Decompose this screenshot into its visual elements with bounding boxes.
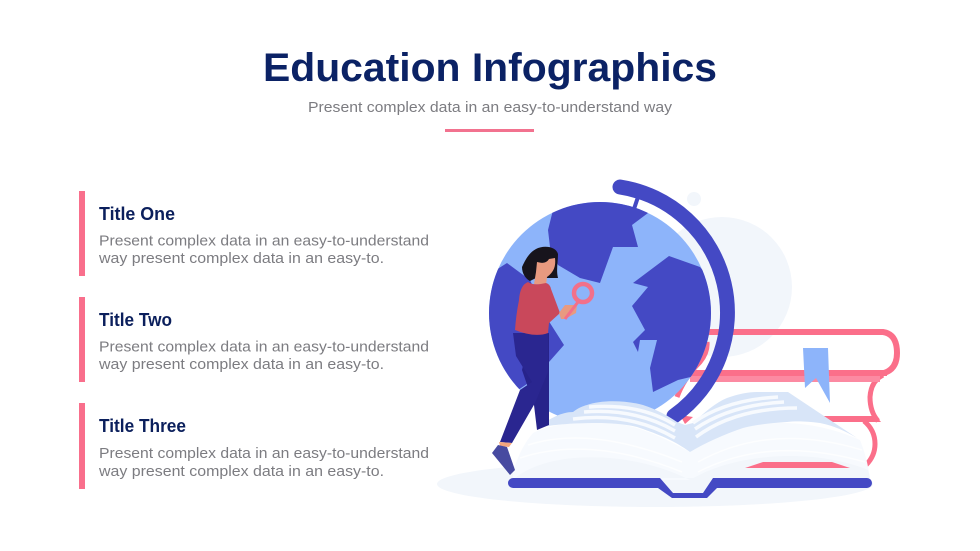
pink book edge <box>745 462 850 468</box>
background circles <box>652 192 792 357</box>
heading one: Title One <box>99 203 175 224</box>
body text two: Present complex data in an easy-to-understand <box>99 338 429 356</box>
hand <box>559 305 577 319</box>
accent bar one <box>79 191 85 276</box>
neck and face <box>534 258 555 285</box>
infographic canvas <box>79 52 900 507</box>
accent bar three <box>79 403 85 489</box>
heading two: Title Two <box>99 309 172 330</box>
body text three: Present complex data in an easy-to-understand <box>99 445 429 462</box>
icon: open book <box>508 392 872 498</box>
heading three: Title Three <box>99 415 186 436</box>
body text one: Present complex data in an easy-to-understand <box>99 232 429 250</box>
magnifier <box>565 284 592 319</box>
globe stand pin <box>634 197 638 209</box>
icon: woman with magnifier <box>492 247 592 475</box>
ankle <box>499 442 512 447</box>
icon: globe <box>480 187 727 424</box>
left page stack <box>513 422 690 480</box>
ground shadow <box>437 461 873 507</box>
front leg <box>500 333 548 443</box>
globe stand arc <box>620 187 727 416</box>
shoe <box>492 445 515 475</box>
subtitle: Present complex data in an easy-to-understand way <box>308 99 673 116</box>
icon: stacked books <box>677 332 897 465</box>
page text lines <box>573 397 797 438</box>
lower page block <box>515 456 870 480</box>
torso <box>515 282 560 335</box>
accent bar two <box>79 297 85 382</box>
title accent line <box>445 129 534 132</box>
hair <box>522 247 558 281</box>
body text one <box>98 232 429 267</box>
body text three: way present complex data in an easy-to. <box>98 463 384 480</box>
bookmark <box>803 348 830 403</box>
back leg <box>522 333 549 430</box>
book inner cover <box>537 392 857 452</box>
globe sphere <box>489 202 711 424</box>
panel: title one <box>79 191 429 276</box>
body text two <box>98 338 429 373</box>
book cover base <box>508 478 872 498</box>
illustration: education scene <box>437 187 897 507</box>
continents <box>489 202 711 392</box>
title: Education Infographics <box>263 46 717 90</box>
body text two: way present complex data in an easy-to. <box>98 356 384 373</box>
panel: title two <box>79 297 429 382</box>
panel: title three <box>79 403 429 489</box>
page edge curves <box>520 438 865 472</box>
right page stack <box>690 423 870 478</box>
body text one: way present complex data in an easy-to. <box>98 250 384 267</box>
body text three <box>98 445 429 480</box>
